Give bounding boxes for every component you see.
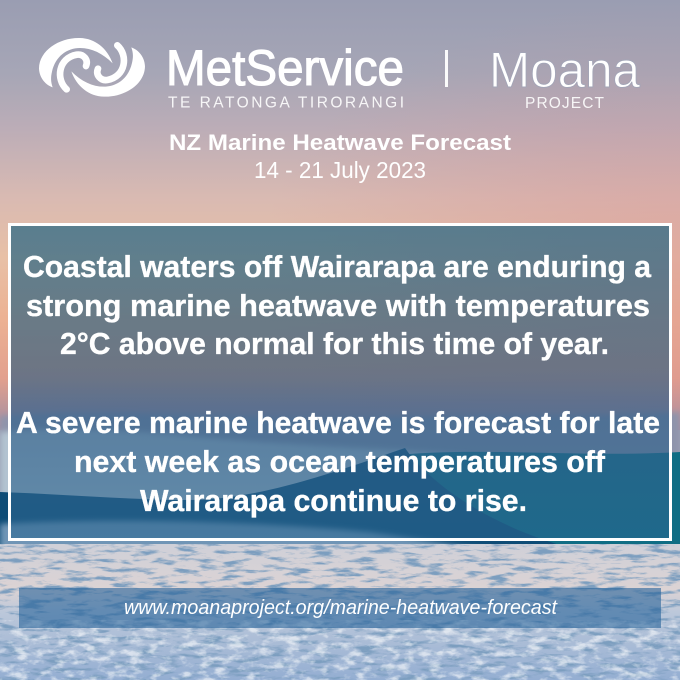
text block: forecast: Wairarapa continue to rise. bbox=[140, 483, 527, 518]
text block: current heatwave: 2°C above normal for this time of year. bbox=[60, 326, 609, 361]
breaking wave bbox=[0, 412, 680, 552]
website link bar: www.moanaproject.org/marine-heatwave-forecast bbox=[124, 597, 558, 619]
website link bar bbox=[19, 588, 661, 628]
logo: Te Ratonga Tirorangi tagline: TE RATONGA TIRORANGI bbox=[168, 94, 404, 112]
panel: main message bbox=[10, 224, 670, 540]
sea foam bbox=[0, 544, 680, 680]
text block: forecast bbox=[16, 405, 660, 518]
date range: 14 - 21 July 2023 bbox=[254, 157, 426, 183]
sunset sky bbox=[0, 0, 680, 430]
logo: Moana wordmark: Moana bbox=[489, 42, 640, 98]
text block: current heatwave: Coastal waters off Wairarapa are enduring a bbox=[23, 249, 652, 284]
logo: MetService wordmark: MetService bbox=[166, 40, 404, 96]
text block: forecast: next week as ocean temperatures off bbox=[74, 444, 606, 479]
logo divider bbox=[445, 50, 448, 87]
heading: NZ Marine Heatwave Forecast bbox=[169, 130, 512, 155]
logo: MetService koru icon bbox=[39, 38, 145, 97]
text block: current heatwave: strong marine heatwave with temperatures bbox=[26, 288, 650, 323]
text block: current heatwave bbox=[23, 249, 652, 361]
logo: Project tagline: PROJECT bbox=[525, 95, 605, 112]
text block: forecast: A severe marine heatwave is forecast for late bbox=[16, 405, 660, 440]
